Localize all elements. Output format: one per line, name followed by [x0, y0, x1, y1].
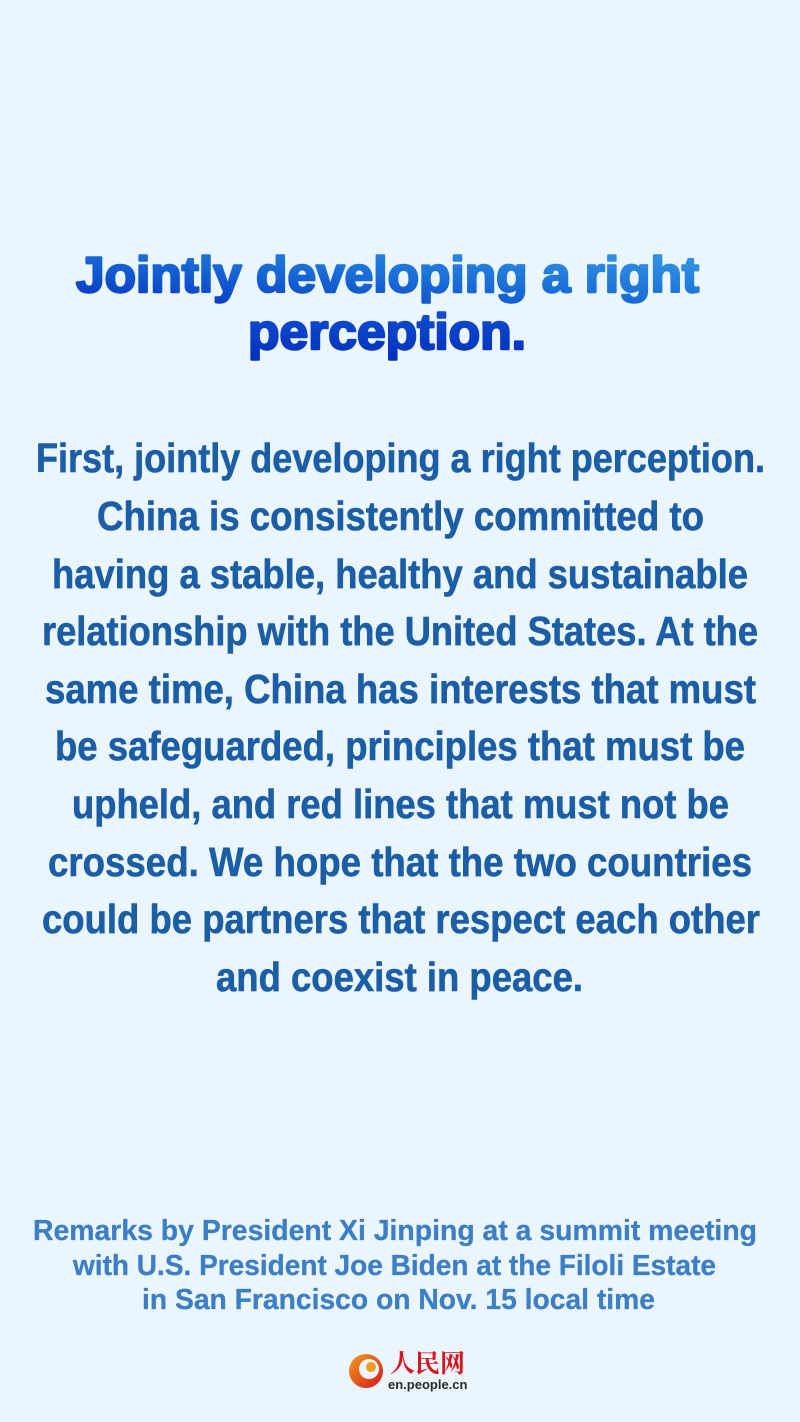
- footer source text: Remarks by President Xi Jinping at a summit meeting: [33, 1215, 757, 1247]
- footer source text: with U.S. President Joe Biden at the Filoli Estate: [72, 1250, 716, 1282]
- footer source text: [33, 1215, 757, 1316]
- logo: people.cn: 人民网: [390, 1344, 465, 1380]
- body text: upheld, and red lines that must not be: [72, 781, 729, 827]
- body text: China is consistently committed to: [97, 493, 704, 539]
- title: [76, 247, 699, 360]
- title: perception.: [248, 304, 526, 360]
- footer source text: in San Francisco on Nov. 15 local time: [142, 1284, 655, 1316]
- logo: people.cn: [349, 1344, 468, 1392]
- body text: [36, 435, 765, 1000]
- logo: people.cn: en.people.cn: [388, 1377, 468, 1392]
- title: Jointly developing a right: [76, 247, 699, 303]
- body text: and coexist in peace.: [216, 954, 583, 1000]
